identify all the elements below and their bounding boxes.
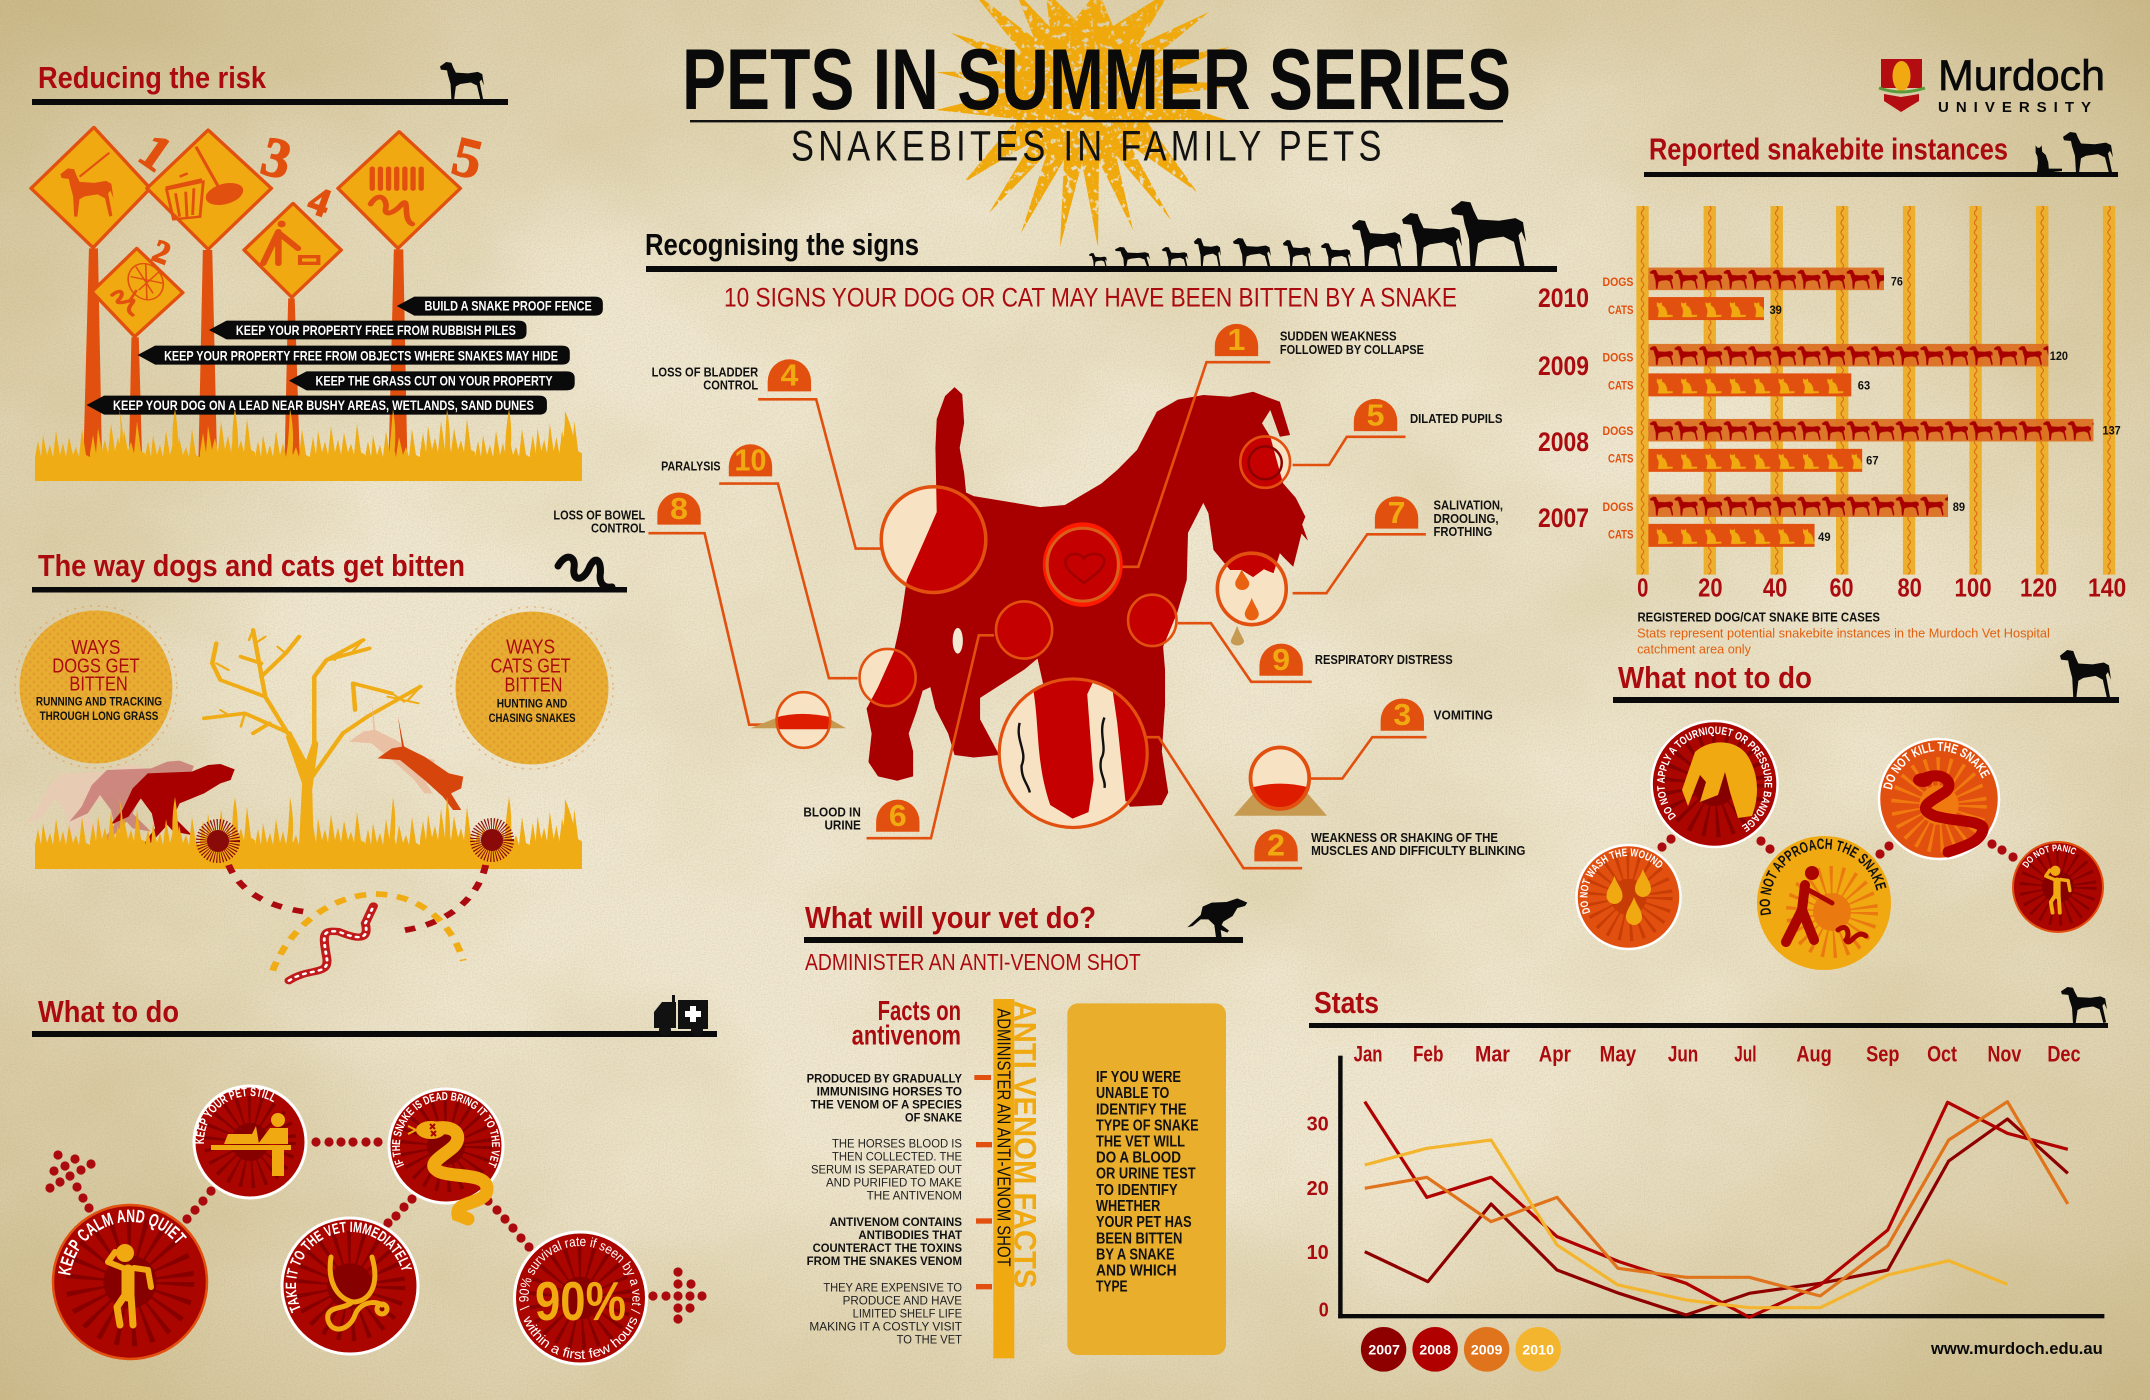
legend: 2010 [1522,1343,1554,1358]
callout panel [1067,1003,1226,1355]
fact: expensive: MAKING IT A COSTLY VISIT [809,1319,963,1333]
sign numbers: 4 [303,177,337,226]
bar row labels [1603,276,1634,542]
bubble text: dogs [36,636,162,723]
badge: if the snake is dead: IF THE SNAKE IS DEAD BRING IT TO THE VET [392,1092,500,1168]
bubble text: dogs: DOGS GET [52,655,140,677]
badge: do not approach the snake [1757,836,1891,970]
bar row labels: DOGS [1603,276,1634,289]
badge: take it to the vet immediately: TAKE IT TO THE VET IMMEDIATELY [286,1222,412,1314]
sign labels: DROOLING, [1434,512,1499,526]
vertical text: anti venom facts: ANTI VENOM FACTS [1007,1001,1042,1288]
fact: produced: IMMUNISING HORSES TO [817,1084,962,1098]
bar values: 39 [1769,304,1782,317]
road signs and posts: BUILD A SNAKE PROOF FENCE [424,299,592,314]
running dog [110,764,235,845]
callout panel: THE VET WILL [1096,1134,1185,1151]
month labels: Aug [1796,1043,1832,1067]
ghost dogs [24,761,194,845]
badge: do not wash the wound [1576,845,1680,949]
bubble text: dogs: BITTEN [69,673,128,695]
wordmark: Murdoch [1938,52,2105,100]
icon: umbrella and snake [112,260,168,315]
fact: expensive: TO THE VET [897,1332,963,1346]
month labels: Jun [1668,1043,1698,1067]
month labels [1354,1043,2081,1067]
icon: shield [1879,59,1925,112]
icon: cat and dog [2036,132,2113,173]
fact: horses blood: THE HORSES BLOOD IS [832,1137,962,1151]
bar values: 76 [1891,276,1903,289]
callout panel: TYPE OF SNAKE [1096,1117,1199,1134]
magnifier: salivation [1216,551,1288,646]
y axis labels: 0 [1319,1298,1329,1322]
magnifier: paralysis [858,648,917,708]
icon: man mowing [263,221,318,263]
y axis labels [1307,1112,1329,1322]
sign numbers: 2 [148,232,175,271]
axes [1338,1056,2104,1318]
bar values [1769,276,2121,544]
bubble text: dogs: WAYS [71,636,120,658]
bar: dogs 2010 [1648,268,1884,290]
bubble text: cats: WAYS [506,635,555,658]
sign labels: CONTROL [703,378,758,392]
dotted connectors [1657,834,2018,862]
grass [35,797,582,869]
sign labels: MUSCLES AND DIFFICULTY BLINKING [1311,844,1525,858]
sign numbers: 1 [129,122,182,182]
month labels: Jul [1734,1043,1756,1067]
vertical text: administer: ADMINISTER AN ANTI-VENOM SHOT [993,1008,1014,1267]
callout panel: IF YOU WERE [1096,1069,1181,1086]
badge: do not approach the snake: DO NOT APPROACH THE SNAKE [1757,836,1889,916]
panel: what will your vet do [804,898,1247,1358]
magnifier: loss of bladder control [880,485,988,594]
panel: reducing the risk [31,60,603,481]
badge: keep your pet still: KEEP YOUR PET STILL [196,1088,274,1144]
magnifier: respiratory distress [1126,593,1178,648]
fact: produced [807,1071,962,1124]
sign numbers [129,122,488,271]
fact: horses blood [811,1137,963,1203]
axis strips [1636,206,2115,575]
badge: do not apply a tourniquet: DO NOT APPLY A TOURNIQUET OR PRESSURE BANDAGE [1656,725,1774,834]
month labels: May [1600,1043,1636,1067]
dome numbers: 9 [1272,643,1290,677]
heading: What not to do [1618,660,1812,695]
road signs and posts: KEEP THE GRASS CUT ON YOUR PROPERTY [316,374,553,389]
panel: recognising the signs [553,201,1557,868]
x axis labels: 120 [2020,574,2057,603]
chart note [1637,627,2050,657]
panel: stats [1307,985,2108,1372]
icon: dog [2061,987,2107,1023]
panel: the way dogs and cats get bitten [15,548,627,981]
icon: fence and snake [371,169,421,224]
subheading: 10 SIGNS YOUR DOG OR CAT MAY HAVE BEEN BITTEN BY A SNAKE [724,282,1457,312]
bar: cats 2008 [1648,449,1862,472]
numbered domes [657,324,1424,861]
fact: horses blood: AND PURIFIED TO MAKE [826,1176,962,1190]
icon: running dog [1187,898,1247,937]
badge: do not kill the snake [1879,739,1999,859]
magnifier: blood in urine [996,601,1052,659]
facts heading: Facts on [878,995,961,1026]
month labels: Nov [1987,1043,2021,1067]
fact: horses blood: THEN COLLECTED. THE [832,1150,962,1164]
sign labels: LOSS OF BOWEL [553,508,645,522]
callout panel: WHETHER [1096,1198,1160,1215]
dome numbers: 3 [1393,698,1411,732]
heading: Reducing the risk [38,60,267,95]
sign labels: FROTHING [1434,525,1492,539]
title block [682,32,1511,170]
icon: dog on lead [60,153,113,217]
fact: antibodies: ANTIBODIES THAT [858,1228,963,1242]
bar values: 120 [2050,350,2068,363]
callout panel: TO IDENTIFY [1096,1182,1178,1199]
dome numbers: 7 [1388,496,1405,530]
fact: produced: THE VENOM OF A SPECIES [811,1097,962,1111]
fact: expensive [809,1280,963,1346]
tree [204,630,420,869]
icon: dog [440,62,484,100]
badge: keep calm and quiet: KEEP CALM AND QUIET [58,1210,187,1276]
fact: antibodies: FROM THE SNAKES VENOM [807,1254,962,1268]
dome numbers: 8 [670,492,688,526]
vertical bar [993,999,1014,1358]
leaping cat [378,717,463,810]
fact: expensive: LIMITED SHELF LIFE [853,1306,962,1320]
bar row labels: CATS [1608,304,1634,317]
road signs and posts: KEEP YOUR PROPERTY FREE FROM OBJECTS WHERE SNAKES MAY HIDE [164,349,558,364]
dog silhouette [867,387,1308,807]
sunburst behind title [936,0,1240,248]
callout panel: BY A SNAKE [1096,1246,1175,1263]
sign labels: BLOOD IN [803,805,861,819]
bar values: 67 [1866,455,1879,468]
year labels: 2010 [1538,283,1589,313]
bar: cats 2007 [1648,524,1815,547]
magnifier: weakness [996,676,1149,830]
sign labels: CONTROL [591,521,645,535]
sign labels: FOLLOWED BY COLLAPSE [1280,343,1424,357]
fact: expensive: PRODUCE AND HAVE [843,1293,962,1307]
bar row labels: CATS [1608,380,1634,393]
heading: Reported snakebite instances [1649,132,2008,166]
dome numbers: 6 [889,799,907,833]
banded snake [289,906,373,981]
road signs and posts: KEEP YOUR PROPERTY FREE FROM RUBBISH PILES [236,323,516,339]
main title: PETS IN SUMMER SERIES [682,32,1511,128]
x axis labels: 40 [1763,574,1787,603]
badge: do not panic: DO NOT PANIC [2021,843,2078,870]
bar: cats 2010 [1648,297,1764,320]
bar row labels: DOGS [1603,352,1634,365]
x axis labels [1637,574,2126,603]
bubble text: dogs: RUNNING AND TRACKING [36,695,162,708]
x axis labels: 80 [1897,574,1922,603]
subtitle: SNAKEBITES IN FAMILY PETS [791,123,1388,170]
panel: reported snakebite instances [1538,132,2126,657]
month labels: Mar [1475,1043,1510,1067]
dome numbers: 4 [780,359,799,393]
panel: what not to do [1576,650,2119,970]
badge: keep your pet still [193,1085,306,1198]
magnifier: vomiting [1234,744,1327,816]
fact: expensive: THEY ARE EXPENSIVE TO [823,1280,962,1294]
badge: take it to the vet immediately [282,1218,418,1354]
bar row labels: DOGS [1603,501,1634,514]
x axis labels: 20 [1698,574,1723,603]
icon: ambulance [654,995,708,1036]
dome numbers: 5 [1367,398,1384,432]
legend: 2007 [1368,1343,1400,1358]
bar row labels: CATS [1608,453,1634,466]
x axis labels: 140 [2088,574,2126,603]
bar: dogs 2008 [1648,419,2093,441]
legend: 2008 [1419,1343,1451,1358]
x axis labels: 0 [1637,574,1648,603]
bubble text: cats: HUNTING AND [497,697,567,710]
sign labels: VOMITING [1434,708,1493,722]
sign labels: DILATED PUPILS [1410,412,1502,426]
bubble text: cats: BITTEN [504,673,562,696]
badge: 90 percent survival: 90% [535,1270,626,1332]
panel: what to do [32,994,717,1364]
bubble text: cats [489,635,576,725]
month labels: Apr [1539,1043,1571,1067]
sign labels: PARALYSIS [661,459,720,473]
callout panel: UNABLE TO [1096,1085,1169,1102]
chart note: catchment area only [1637,643,1751,657]
bar: dogs 2009 [1648,344,2048,366]
callout panel: DO A BLOOD [1096,1150,1181,1167]
fact: antibodies [807,1215,963,1268]
bubble text: cats: CATS GET [491,654,571,677]
magnifier: dilated pupils [1239,435,1292,490]
bar values: 63 [1858,380,1870,393]
panel: Murdoch logo [1879,52,2105,116]
callout panel: TYPE [1096,1279,1128,1296]
facts heading [852,995,961,1050]
chart note: Stats represent potential snakebite instances in the Murdoch Vet Hospital [1637,627,2050,641]
subheading: ADMINISTER AN ANTI-VENOM SHOT [805,949,1141,975]
ghost cat [349,700,435,793]
bubble: ways dogs get bitten [15,606,177,768]
magnifier: collapse heart [1046,525,1120,604]
fact: horses blood: SERUM IS SEPARATED OUT [811,1163,963,1177]
road signs and posts: KEEP YOUR DOG ON A LEAD NEAR BUSHY AREAS, WETLANDS, SAND DUNES [113,398,534,414]
bar values: 49 [1818,531,1831,544]
dashed bite paths [229,865,486,971]
badge: 90 percent survival: within a first few hours [524,1316,638,1360]
tick marks [974,1075,992,1289]
bar values: 89 [1953,501,1965,514]
dome numbers: 10 [735,444,766,478]
fact: produced: OF SNAKE [905,1110,962,1124]
magnifier: loss of bowel control [750,691,846,751]
sign labels [553,330,1525,858]
dotted connectors [45,1137,707,1324]
callout tags [87,297,603,415]
callout panel: YOUR PET HAS [1096,1214,1192,1231]
bar row labels: DOGS [1603,425,1634,438]
fact: horses blood: THE ANTIVENOM [867,1189,962,1203]
y axis labels: 30 [1307,1112,1329,1136]
grass [35,409,582,481]
bar: dogs 2007 [1648,494,1948,517]
badge: 90 percent survival: \ 90% survival rate if seen by a vet / [519,1237,641,1314]
icon: snake [558,557,612,587]
y axis labels: 20 [1307,1177,1329,1200]
month labels: Jan [1354,1043,1382,1067]
icon: doberman [2060,650,2111,698]
heading: Recognising the signs [645,227,919,262]
sign labels: SUDDEN WEAKNESS [1280,330,1397,343]
badge: 90 percent survival [514,1232,646,1364]
heading: What will your vet do? [805,900,1096,935]
panel: stats: Dec [2047,1043,2081,1067]
callout panel: BEEN BITTEN [1096,1230,1182,1247]
month labels: Sep [1866,1043,1899,1067]
dome numbers [670,323,1411,863]
icon: bin and broom [166,147,247,219]
heading: The way dogs and cats get bitten [38,548,465,583]
bar: cats 2009 [1648,373,1851,396]
sign labels: SALIVATION, [1434,499,1503,512]
year labels: 2007 [1538,503,1589,533]
sign numbers: 3 [255,125,297,192]
fact: antibodies: COUNTERACT THE TOXINS [813,1241,962,1255]
fact: produced: PRODUCED BY GRADUALLY [807,1071,962,1085]
dome numbers: 2 [1267,829,1285,863]
legend: 2009 [1471,1343,1502,1358]
x axis labels: 100 [1955,574,1992,603]
legend [1361,1327,1561,1372]
year labels [1538,283,1589,533]
chart caption: REGISTERED DOG/CAT SNAKE BITE CASES [1637,611,1880,625]
year labels: 2008 [1538,427,1589,457]
heading: Stats [1314,985,1379,1020]
bar row labels: CATS [1608,529,1634,542]
x axis labels: 60 [1829,574,1853,603]
bar values: 137 [2103,425,2121,438]
sign labels: RESPIRATORY DISTRESS [1315,653,1453,667]
badge: do not kill the snake: DO NOT KILL THE SNAKE [1880,739,1993,791]
callout panel: OR URINE TEST [1096,1166,1196,1183]
bubble text: cats: CHASING SNAKES [489,711,576,725]
sign labels: WEAKNESS OR SHAKING OF THE [1311,831,1498,845]
heading: What to do [38,994,179,1029]
line chart [1365,1102,2068,1317]
sign labels: LOSS OF BLADDER [652,365,758,379]
sign labels: URINE [824,818,861,832]
badge: keep calm and quiet [53,1205,207,1359]
bite bursts [202,824,508,857]
panel: Murdoch logo: UNIVERSITY [1938,99,2091,116]
badge: do not wash the wound: DO NOT WASH THE WOUND [1580,848,1662,914]
bubble text: dogs: THROUGH LONG GRASS [40,709,159,723]
badge: if the snake is dead [389,1089,503,1219]
month labels: Feb [1413,1043,1443,1067]
leader lines [648,362,1427,868]
callout panel: AND WHICH [1096,1262,1177,1279]
dome numbers: 1 [1228,323,1245,357]
dog silhouettes parade [1089,201,1526,267]
bubble: ways cats get bitten [451,607,613,769]
fact: antibodies: ANTIVENOM CONTAINS [829,1215,962,1229]
facts heading: antivenom [852,1019,961,1050]
month labels: Oct [1927,1043,1957,1067]
year labels: 2009 [1538,351,1589,381]
road signs and posts [31,127,603,463]
callout panel: IDENTIFY THE [1096,1101,1187,1118]
sign numbers: 5 [446,125,488,192]
y axis labels: 10 [1307,1241,1329,1264]
badge: do not panic [2013,842,2103,932]
